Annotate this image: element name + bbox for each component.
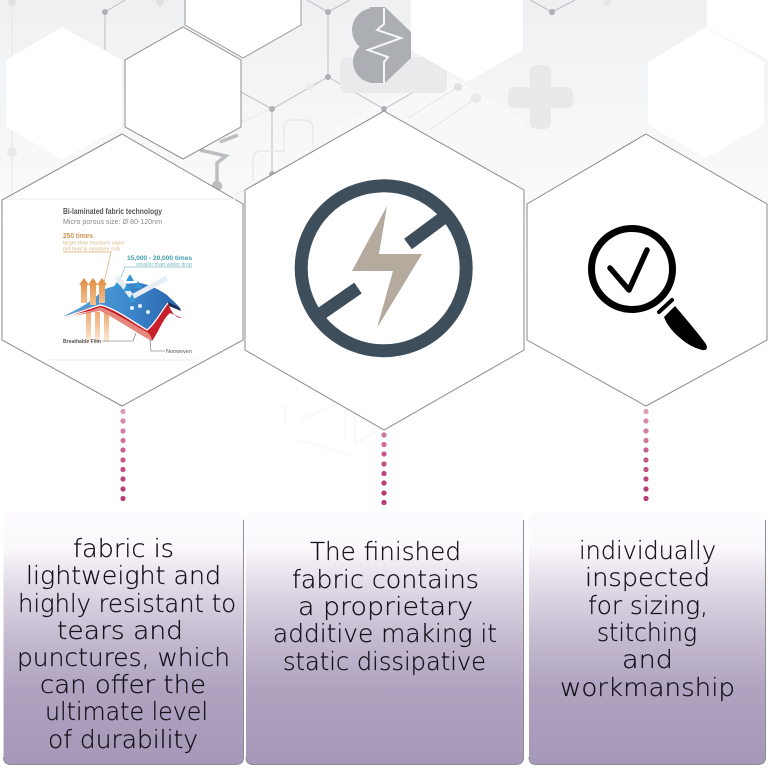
- white top hexagon: [411, 0, 523, 82]
- panel: hexagon inspection: [527, 134, 767, 406]
- dotted connector right: [643, 409, 649, 501]
- white corner hexagon: [707, 0, 768, 60]
- text: inspection: workmanship: [560, 673, 735, 702]
- text: inspection: individually: [579, 536, 716, 565]
- outlined top hexagon: [185, 0, 301, 58]
- text: inspection: [560, 536, 735, 702]
- network lines and nodes: [7, 0, 768, 200]
- outlined small hexagon: [125, 27, 241, 159]
- text: static dissipative: additive making it: [273, 619, 497, 648]
- text: inspection: inspected: [585, 563, 710, 592]
- label: breathable film: Breathable Film: [63, 339, 101, 345]
- callout: 250 times: [63, 233, 125, 283]
- panel: static text: [246, 512, 524, 764]
- text: static dissipative: fabric contains: [292, 565, 479, 594]
- callout: 15,000 - 20,000 times: 15,000 - 20,000 times: [127, 255, 192, 262]
- icon: heart with pulse: [352, 7, 411, 84]
- callout: 250 times: larger than moisture vapor: [63, 240, 125, 246]
- background cross shape: [340, 57, 447, 93]
- callout: 15,000 - 20,000 times: smaller than water drop: [136, 262, 192, 268]
- text: durability: ultimate level: [45, 697, 208, 726]
- heading: fabric technology: Bi-laminated fabric technology: [63, 207, 162, 216]
- white background hexagon left: [6, 27, 122, 159]
- text: static dissipative: a proprietary: [298, 592, 473, 621]
- text: durability: fabric is: [73, 534, 174, 563]
- text: durability: lightweight and: [26, 561, 221, 590]
- icon: plus cross: [508, 65, 573, 129]
- dotted connector middle: [381, 432, 387, 505]
- callout: 250 times: 250 times: [63, 233, 93, 240]
- dotted connector left: [120, 409, 126, 501]
- fabric layers illustration: [64, 274, 182, 342]
- label: nonwoven: [150, 340, 192, 355]
- text: durability: highly resistant to: [18, 589, 236, 618]
- text: durability: [17, 534, 236, 754]
- text: inspection: stitching: [597, 618, 697, 647]
- callout: 15,000 - 20,000 times: [118, 255, 192, 285]
- text: static dissipative: [273, 537, 497, 676]
- panel: hexagon fabric technology: [2, 134, 243, 406]
- panel: inspection text: [529, 512, 766, 764]
- label: nonwoven: Nonwoven: [166, 349, 192, 355]
- text: static dissipative: The finished: [310, 537, 461, 566]
- icon: magnifier with check: [592, 228, 707, 350]
- panel: durability text: [4, 512, 244, 764]
- icon: gray squiggle: [200, 135, 238, 190]
- white background hexagon right: [648, 27, 764, 158]
- text: inspection: and: [622, 645, 673, 674]
- text: durability: punctures, which: [17, 643, 230, 672]
- text: inspection: for sizing,: [588, 591, 708, 620]
- text: durability: can offer the: [40, 670, 206, 699]
- text: durability: tears and: [57, 616, 183, 645]
- icon: no static: [301, 186, 466, 351]
- text: static dissipative: static dissipative: [283, 647, 486, 676]
- panel: hexagon static: [245, 111, 524, 430]
- callout: 250 times: (let heat & moisture out): [63, 246, 120, 252]
- subheading: pore size: Micro porous size: Ø 80-120nm: [63, 217, 162, 226]
- label: breathable film: [63, 333, 136, 345]
- arrows: moisture vapor: [79, 278, 107, 305]
- text: durability: of durability: [48, 725, 198, 754]
